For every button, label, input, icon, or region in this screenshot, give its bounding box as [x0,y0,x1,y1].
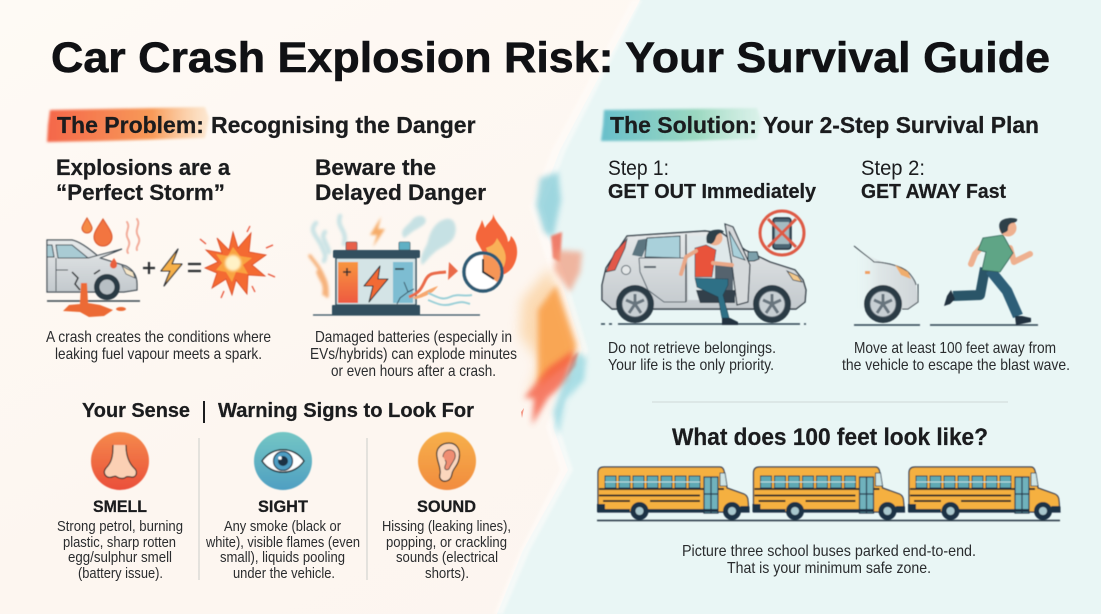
text: step 1 body [608,340,776,374]
text: sight details: under the vehicle. [233,565,335,582]
subheading: perfect storm [56,155,231,205]
icon: eye [254,432,312,490]
label: sight: SIGHT [258,497,309,516]
label: smell: SMELL [93,497,147,516]
heading: warning signs: Your Sense [82,400,190,422]
text: delayed danger body: Damaged batteries (especially in [315,329,512,346]
text: smell details [57,518,183,582]
text: smell details: egg/sulphur smell [68,549,172,566]
text: sound details [382,518,511,582]
label: sound: SOUND [417,497,476,516]
bus 3 [908,467,1060,520]
text: step 2 body: the vehicle to escape the blast wave. [842,357,1070,374]
heading: step 2: Step 2: [861,157,925,180]
bus 1 [597,467,750,520]
text: sound details: shorts). [425,565,469,582]
column: sound [382,432,511,582]
subheading: perfect storm: Explosions are a [56,155,231,180]
heading: the solution: The Solution: [610,112,757,138]
panel: the solution [597,108,1070,577]
icon: nose [91,432,149,490]
icon: flame [476,214,517,276]
subheading: delayed danger [315,155,486,205]
icon: spark bolt [161,249,182,286]
bus 2 [752,467,905,520]
icon: three school buses [597,467,1060,520]
heading: step 2: GET AWAY Fast [861,181,1006,203]
text: smell details: plastic, sharp rotten [63,534,176,551]
panel: the problem [46,107,517,582]
subheading: delayed danger: Beware the [315,155,436,180]
runner [944,218,1031,325]
text: smell details: Strong petrol, burning [57,518,183,535]
text: perfect storm body: A crash creates the conditions where [46,329,271,346]
heading: the solution: Your 2-Step Survival Plan [763,112,1039,138]
text: buses caption: That is your minimum safe zone. [727,560,931,577]
text: delayed danger body [310,329,517,380]
icon: clock [464,253,502,291]
icon: fuel drops [82,218,112,246]
icon: battery with delayed fire [310,214,517,315]
heading: warning signs [82,400,474,423]
column: sight [205,432,360,582]
text: step 2 body [842,340,1070,374]
heading highlight: solution [601,108,761,141]
text: step 2 body: Move at least 100 feet away from [854,340,1056,357]
text: buses caption: Picture three school buses parked end-to-end. [682,543,976,560]
heading: step 1: GET OUT Immediately [608,181,817,203]
text: sound details: Hissing (leaking lines), [382,518,511,535]
subheading: delayed danger: Delayed Danger [315,180,486,205]
text: perfect storm body: leaking fuel vapour meets a spark. [55,346,262,363]
column: smell [57,432,183,582]
icon: car front and running person [853,218,1038,325]
arrow: battery to timer [409,272,446,297]
text: sight details: small), liquids pooling [220,549,345,566]
heading: 100 feet: What does 100 feet look like? [672,424,988,451]
heading: warning signs: Warning Signs to Look For [218,400,474,422]
title: Car Crash Explosion Risk: Your Survival Guide [51,34,1050,82]
heading: step 2 [861,157,1006,203]
heading: the problem: The Problem: [57,112,204,138]
icon: equals [188,264,201,271]
heading: the problem: Recognising the Danger [211,112,476,138]
text: sound details: popping, or crackling [386,534,507,551]
person [681,230,738,325]
icon: person exiting car [601,211,806,325]
heading highlight: problem [47,107,209,142]
text: step 1 body: Do not retrieve belongings. [608,340,776,357]
icon: plus [143,262,155,274]
text: delayed danger body: EVs/hybrids) can explode minutes [310,346,517,363]
text: buses caption [682,543,976,577]
icon: explosion burst [200,226,275,298]
paint splash divider [517,172,586,482]
text: sound details: sounds (electrical [396,549,498,566]
subheading: perfect storm: “Perfect Storm” [56,180,225,205]
text: step 1 body: Your life is the only priority. [608,357,774,374]
text: perfect storm body [46,329,271,363]
heading: step 1 [608,157,817,203]
icon: crashed car equation [47,218,275,317]
text: smell details: (battery issue). [78,565,163,582]
heading: step 1: Step 1: [608,157,669,180]
icon: no phone [760,211,804,255]
text: sight details: white), visible flames (even [205,534,360,551]
dividers [199,438,367,580]
text: delayed danger body: or even hours after a crash. [331,363,496,380]
text: sight details [205,518,360,582]
icon: ear [418,432,476,490]
text: sight details: Any smoke (black or [224,518,341,535]
